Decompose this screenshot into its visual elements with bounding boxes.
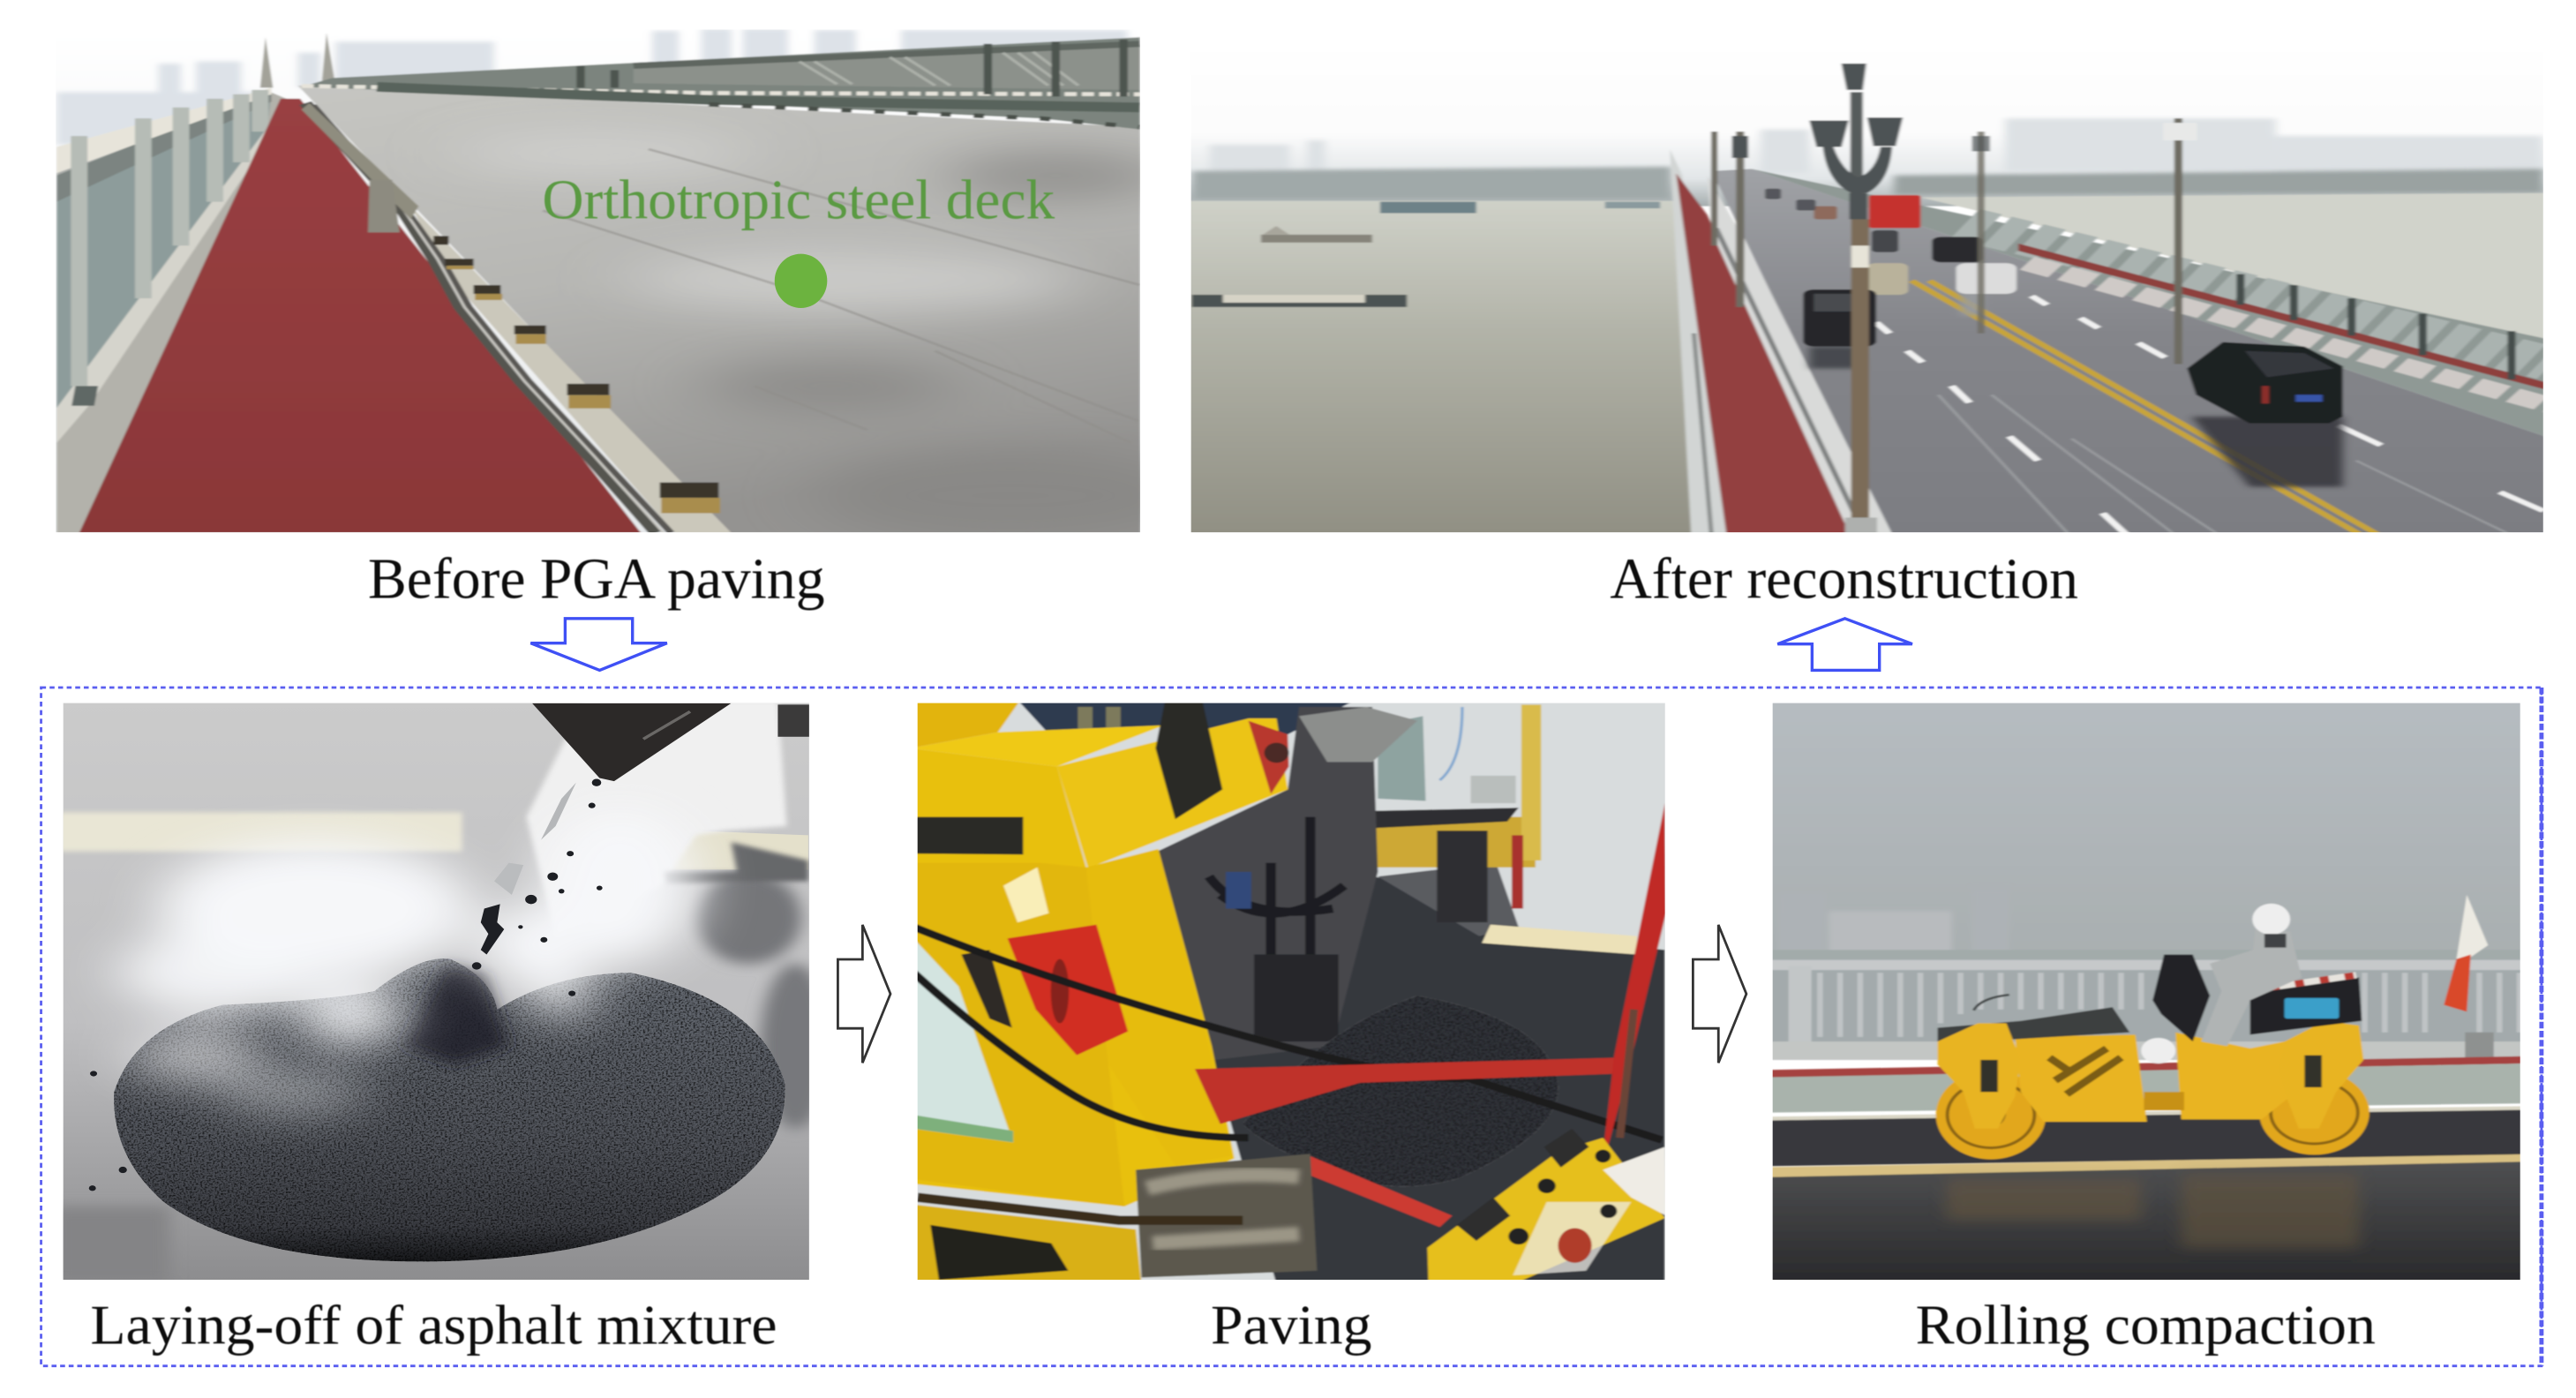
right water bbox=[1920, 193, 2551, 347]
caption: before PGA paving: Before PGA paving bbox=[368, 548, 825, 612]
boot bbox=[664, 842, 808, 883]
lower machinery bbox=[911, 1204, 1141, 1284]
top hoses bbox=[1018, 700, 1356, 737]
arrow: down to process bbox=[530, 619, 667, 670]
steam bbox=[117, 808, 696, 1115]
city skyline bbox=[56, 28, 1127, 145]
cream band bbox=[58, 812, 462, 852]
white trousers bbox=[526, 700, 786, 936]
cars bbox=[1765, 189, 2343, 424]
caption: laying-off of asphalt mixture: Laying-off of asphalt mixture bbox=[90, 1295, 777, 1357]
scraper bbox=[1136, 1154, 1317, 1278]
rear paver bbox=[1344, 817, 1536, 868]
asphalt pile bbox=[114, 958, 785, 1261]
far railing bbox=[302, 37, 1140, 130]
left railing bbox=[56, 90, 272, 408]
road bbox=[1712, 169, 2551, 537]
arrow: up to result bbox=[1777, 619, 1912, 670]
rear drum bbox=[1936, 1071, 2046, 1160]
front drum bbox=[2259, 1071, 2369, 1154]
hood bbox=[1938, 1007, 2129, 1041]
background bbox=[911, 700, 1671, 1284]
glove bbox=[1603, 1147, 1666, 1215]
dark ground patches bbox=[53, 872, 830, 1284]
operator bbox=[2201, 927, 2302, 1046]
steel deck surface bbox=[298, 86, 1140, 533]
yellow machine body bbox=[911, 748, 1235, 1206]
caption: paving: Paving bbox=[1211, 1295, 1371, 1357]
highlight bbox=[1003, 868, 1048, 922]
panel: laying-off photo bbox=[53, 700, 830, 1284]
lamp posts bbox=[1715, 92, 2178, 526]
yellow centre lines bbox=[1911, 281, 2365, 537]
arrow: step two to three bbox=[1693, 925, 1746, 1063]
red lug bbox=[1249, 721, 1289, 794]
lane dashes bbox=[1876, 296, 2543, 537]
curb blocks bbox=[433, 236, 718, 498]
white curb bbox=[411, 207, 732, 533]
caption: after reconstruction: After reconstruction bbox=[1610, 548, 2078, 612]
wet reflections bbox=[1809, 289, 2343, 487]
bridge towers bbox=[260, 33, 334, 87]
steering bbox=[2152, 954, 2210, 1041]
falling asphalt bbox=[89, 779, 603, 1191]
red holder bbox=[1008, 925, 1128, 1056]
control box bbox=[1427, 1138, 1665, 1284]
caption: rolling compaction: Rolling compaction bbox=[1916, 1295, 2376, 1357]
panel: after reconstruction photo bbox=[1191, 63, 2543, 533]
red stripe and parapet bbox=[1769, 1056, 2526, 1079]
warning label bbox=[913, 938, 1013, 1142]
boats bbox=[1380, 202, 1476, 214]
left sidewalk bbox=[56, 90, 287, 533]
panel: before PGA paving photo bbox=[45, 22, 1206, 544]
housing opening bbox=[911, 817, 1024, 854]
frame: construction process bbox=[41, 688, 2542, 1366]
sky bbox=[1769, 700, 2526, 975]
yellow line bbox=[1769, 1154, 2526, 1177]
stripes bbox=[2049, 1048, 2121, 1094]
chassis bbox=[2015, 1034, 2147, 1122]
marker: green dot bbox=[775, 254, 827, 308]
red walkway bbox=[79, 99, 641, 533]
bracket bbox=[1155, 700, 1222, 819]
railing bbox=[1769, 959, 2526, 1060]
far shoreline bbox=[1210, 118, 2542, 176]
red arm bbox=[1195, 1057, 1620, 1124]
panel: paving photo bbox=[911, 700, 1671, 1284]
forks bbox=[1938, 1023, 2021, 1129]
machine core bbox=[1153, 707, 1378, 1060]
right railing and parapet bbox=[1752, 169, 2551, 439]
red walkway bbox=[1676, 173, 1851, 537]
hopper bbox=[532, 703, 731, 781]
cables bbox=[305, 103, 656, 533]
distant buildings bbox=[1777, 888, 2009, 959]
label: orthotropic steel deck: Orthotropic steel deck bbox=[542, 169, 1055, 231]
arrow: step one to two bbox=[837, 925, 890, 1063]
asphalt heap bbox=[1243, 996, 1558, 1186]
wet road bbox=[1769, 1161, 2526, 1284]
roller bbox=[1936, 904, 2369, 1160]
panel: rolling compaction photo bbox=[1769, 700, 2526, 1284]
reflection bbox=[1946, 1175, 2359, 1248]
flag bbox=[2457, 895, 2488, 959]
asphalt lane bbox=[1769, 1108, 2526, 1166]
left railing bbox=[1670, 149, 1727, 537]
seat console bbox=[2250, 977, 2362, 1034]
hydraulic cables bbox=[913, 927, 1662, 1140]
left water bbox=[1183, 201, 1694, 538]
inner railing bbox=[1708, 176, 1894, 537]
